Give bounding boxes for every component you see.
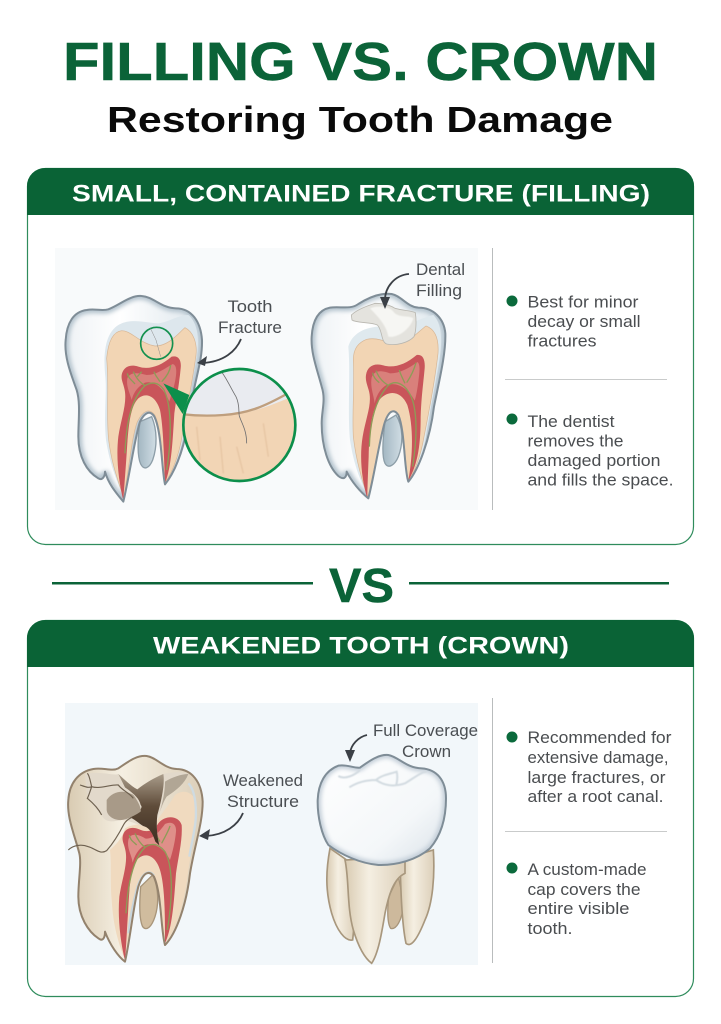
bullet: recommended for: Recommended for — [528, 729, 672, 747]
magnified fracture — [163, 363, 303, 481]
bullet: recommended for: large fractures, or — [528, 769, 666, 787]
bullet: recommended for: extensive damage, — [528, 749, 668, 767]
bullet: custom-made cap: cap covers the — [528, 881, 640, 899]
bullet: custom-made cap — [506, 861, 646, 938]
label: dental filling: Dental — [416, 260, 465, 279]
VS divider: VS — [329, 560, 394, 613]
arrow: tooth fracture — [197, 339, 241, 366]
bullet: best for: Best for minor — [528, 294, 639, 312]
bullet: dentist removes — [506, 413, 674, 490]
panel: filling — [27, 168, 694, 544]
icon: tooth with fracture — [65, 296, 303, 502]
bullet: custom-made cap: A custom-made — [528, 861, 646, 879]
label: tooth fracture: Tooth — [228, 297, 272, 316]
illustration background: filling — [55, 248, 478, 510]
bullet: dentist removes: The dentist — [528, 413, 615, 431]
icon: weakened tooth — [68, 756, 203, 962]
bullet: custom-made cap: tooth. — [528, 920, 572, 938]
label: dental filling — [416, 260, 465, 300]
arrow: dental filling — [380, 274, 409, 309]
panel header: filling: SMALL, CONTAINED FRACTURE (FILLING) — [72, 180, 650, 208]
bullet: custom-made cap: entire visible — [528, 900, 630, 918]
label: weakened structure: Weakened — [223, 771, 303, 790]
dental filling — [351, 303, 416, 345]
icon: full coverage crown on tooth — [318, 755, 446, 963]
label: full coverage crown — [373, 721, 478, 761]
bullet: dentist removes: and fills the space. — [528, 472, 674, 490]
panel header: crown: WEAKENED TOOTH (CROWN) — [153, 632, 569, 660]
bullet: best for: fractures — [528, 332, 596, 350]
label: dental filling: Filling — [416, 281, 462, 300]
arrow: full coverage crown — [345, 735, 367, 762]
label: full coverage crown: Crown — [402, 742, 451, 761]
panel header: filling — [27, 168, 694, 215]
label: tooth fracture — [218, 297, 282, 337]
label: tooth fracture: Fracture — [218, 318, 282, 337]
crown — [318, 755, 446, 865]
panel header: crown — [27, 620, 694, 667]
label: full coverage crown: Full Coverage — [373, 721, 478, 740]
bullet: dentist removes: removes the — [528, 432, 624, 450]
bullet: best for — [506, 294, 640, 350]
damage cracks — [68, 772, 188, 852]
label: weakened structure — [223, 771, 303, 811]
bullet: recommended for — [506, 729, 672, 806]
illustration background: crown — [65, 703, 478, 965]
bullet: dentist removes: damaged portion — [528, 452, 660, 470]
panel: crown — [27, 620, 694, 996]
title: FILLING VS. CROWN — [63, 32, 658, 92]
bullet: recommended for: after a root canal. — [528, 788, 664, 806]
label: weakened structure: Structure — [227, 792, 299, 811]
subtitle: Restoring Tooth Damage — [107, 99, 613, 140]
bullet: best for: decay or small — [528, 313, 640, 331]
icon: tooth with dental filling — [312, 294, 445, 498]
arrow: weakened structure — [199, 813, 243, 840]
